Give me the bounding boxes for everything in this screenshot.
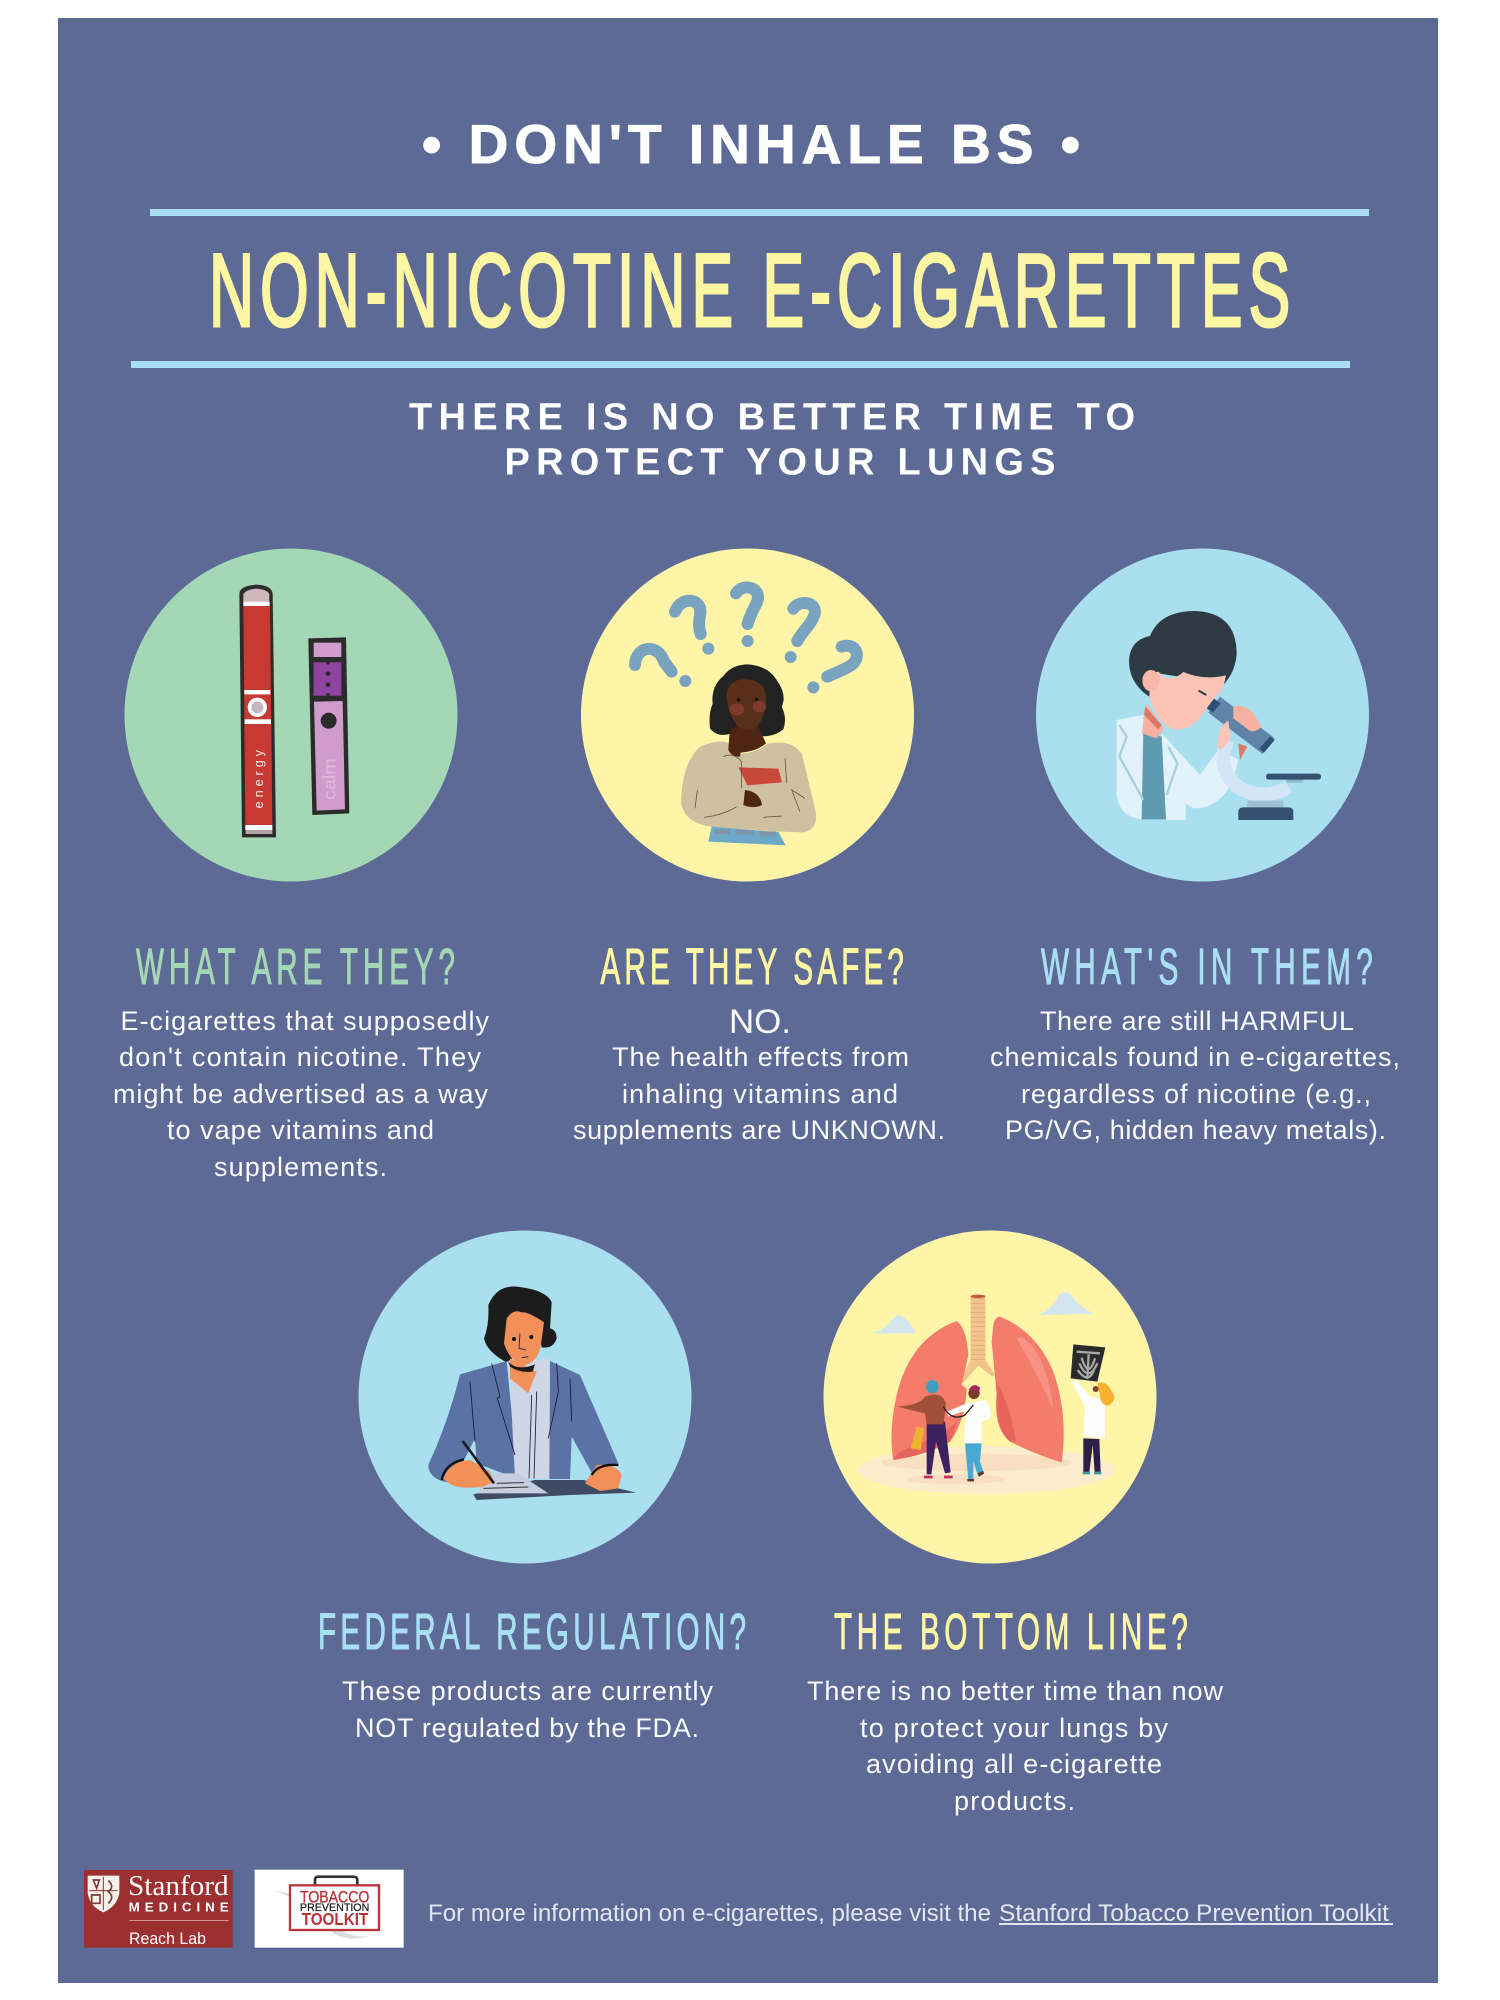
- text block: federal regulation: NOT regulated by the FDA.: [355, 1713, 699, 1743]
- icon: patient and doctor: [897, 1380, 991, 1481]
- text block: the bottom line: There is no better time than now: [807, 1676, 1224, 1706]
- text block: what are they: supplements.: [214, 1152, 387, 1182]
- icon: thinking woman: [681, 664, 816, 845]
- subtitle: [409, 396, 1135, 484]
- icon: doctor with x-ray: [1071, 1344, 1114, 1474]
- text block: what are they: [113, 1006, 490, 1182]
- panel: what are they circle icon: [124, 548, 458, 882]
- subtitle: THERE IS NO BETTER TIME TO: [409, 396, 1135, 438]
- text block: are they safe: supplements are UNKNOWN.: [573, 1115, 945, 1145]
- text block: what are they: don't contain nicotine. They: [119, 1042, 482, 1072]
- panel: are they safe circle icon: [581, 548, 914, 882]
- heading: are they safe: ARE THEY SAFE?: [600, 938, 904, 995]
- footer: more information line: Stanford Tobacco Prevention Toolkit: [999, 1900, 1389, 1927]
- panel: federal regulation circle icon: [358, 1230, 692, 1564]
- title: don't inhale bs: • DON'T INHALE BS •: [422, 113, 1080, 175]
- panel: what's in them circle icon: [1036, 548, 1369, 882]
- heading: federal regulation: FEDERAL REGULATION?: [318, 1603, 746, 1660]
- panel: bottom line circle icon: [824, 1230, 1156, 1564]
- text block: what's in them: [990, 1006, 1400, 1145]
- icon: woman writing at desk: [428, 1287, 636, 1500]
- logo: stanford medicine reach lab: Stanford: [128, 1871, 229, 1902]
- heading: what's in them: WHAT'S IN THEM?: [1041, 938, 1373, 995]
- icon: lungs: [891, 1295, 1064, 1462]
- logo: tobacco prevention toolkit: PREVENTION: [300, 1902, 369, 1914]
- text block: the bottom line: products.: [954, 1786, 1075, 1816]
- logo: stanford medicine reach lab: [84, 1870, 233, 1948]
- logo: tobacco prevention toolkit: TOOLKIT: [302, 1909, 368, 1929]
- text block: are they safe: NO.: [729, 1003, 791, 1041]
- text block: what's in them: There are still HARMFUL: [1040, 1006, 1354, 1036]
- icon: clouds: [872, 1292, 1093, 1333]
- text block: what are they: to vape vitamins and: [167, 1115, 434, 1145]
- text block: federal regulation: These products are currently: [342, 1676, 714, 1706]
- logo: tobacco prevention toolkit: TOBACCO: [300, 1887, 369, 1906]
- text block: federal regulation: [342, 1676, 714, 1743]
- icon: red vape pen: [239, 585, 276, 837]
- footer: more information line: [428, 1900, 1393, 1927]
- text block: are they safe: inhaling vitamins and: [622, 1079, 898, 1109]
- text block: are they safe: The health effects from: [612, 1042, 909, 1072]
- text block: are they safe: [573, 1003, 945, 1145]
- text block: what are they: E-cigarettes that supposedly: [120, 1006, 490, 1036]
- logo: stanford medicine reach lab: Reach Lab: [129, 1929, 206, 1948]
- text block: what are they: might be advertised as a way: [113, 1079, 488, 1109]
- icon: red vape pen: energy: [252, 749, 266, 808]
- footer: more information line: For more information on e-cigarettes, please visit the: [428, 1900, 991, 1927]
- text block: the bottom line: avoiding all e-cigarette: [866, 1749, 1162, 1779]
- logo: tobacco prevention toolkit: [255, 1870, 404, 1948]
- icon: scientist with microscope: [1117, 611, 1321, 820]
- heading: what are they: WHAT ARE THEY?: [136, 938, 455, 995]
- main heading: non-nicotine e-cigarettes: NON-NICOTINE E-CIGARETTES: [209, 233, 1290, 349]
- icon: purple vape pod: calm: [319, 758, 339, 800]
- section: what's in them?: [990, 938, 1400, 1145]
- section: the bottom line?: [807, 1603, 1224, 1816]
- section: are they safe?: [573, 938, 945, 1145]
- section: what are they?: [113, 938, 490, 1182]
- text block: what's in them: PG/VG, hidden heavy metals).: [1005, 1115, 1386, 1145]
- text block: the bottom line: to protect your lungs by: [860, 1713, 1168, 1743]
- logo: stanford medicine reach lab: MEDICINE: [129, 1899, 229, 1914]
- section: federal regulation?: [318, 1603, 746, 1743]
- text block: the bottom line: [807, 1676, 1224, 1816]
- text block: what's in them: regardless of nicotine (e.g.,: [1021, 1079, 1371, 1109]
- icon: question marks: [635, 587, 857, 693]
- text block: what's in them: chemicals found in e-cigarettes,: [990, 1042, 1400, 1072]
- icon: purple vape pod: [308, 637, 349, 815]
- heading: the bottom line: THE BOTTOM LINE?: [834, 1603, 1188, 1660]
- subtitle: PROTECT YOUR LUNGS: [504, 442, 1056, 484]
- icon: ground shadow: [858, 1446, 1115, 1494]
